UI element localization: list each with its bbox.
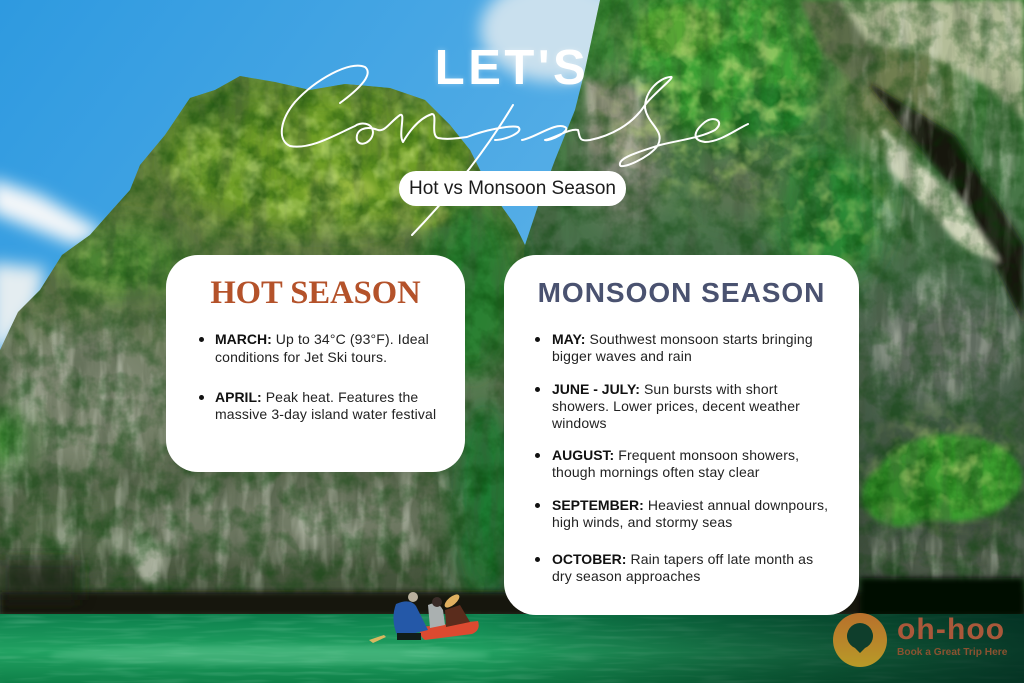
item: March: conditions for Jet Ski tours.	[215, 349, 387, 365]
panel: hot season	[166, 255, 465, 472]
item: May	[535, 331, 813, 364]
item: August	[535, 447, 799, 480]
item: September	[535, 497, 828, 530]
item: October: OCTOBER: Rain tapers off late month as	[552, 551, 813, 567]
item: June - July: JUNE - JULY: Sun bursts with short	[552, 381, 778, 397]
item: March: MARCH: Up to 34°C (93°F). Ideal	[215, 331, 429, 347]
item: May: bigger waves and rain	[552, 348, 692, 364]
item: June - July: showers. Lower prices, decent weather	[552, 398, 800, 414]
title: LET'S: LET'S	[435, 41, 589, 95]
item: June - July	[535, 381, 800, 431]
dark shoreline	[0, 592, 1024, 616]
item: September: high winds, and stormy seas	[552, 514, 732, 530]
item: May: MAY: Southwest monsoon starts bringing	[552, 331, 813, 347]
logo tagline: Book a Great Trip Here	[897, 647, 1007, 658]
heading: monsoon season: MONSOON SEASON	[538, 277, 825, 308]
logo: oh-hoo	[833, 613, 1008, 667]
item: October	[535, 551, 813, 584]
subtitle pill: Hot vs Monsoon Season	[409, 178, 616, 199]
icon: location pin ring	[833, 613, 887, 667]
item: April: APRIL: Peak heat. Features the	[215, 389, 418, 405]
item: August: though mornings often stay clear	[552, 464, 760, 480]
item: June - July: windows	[552, 415, 607, 431]
logo wordmark: oh-hoo	[897, 613, 1005, 646]
title script: Compare	[280, 64, 749, 236]
panel: monsoon season	[504, 255, 859, 615]
item: April	[199, 389, 436, 422]
item: March	[199, 331, 429, 365]
subtitle pill	[399, 171, 626, 206]
item: September: SEPTEMBER: Heaviest annual downpours,	[552, 497, 828, 513]
kayak with paddlers	[369, 592, 479, 643]
item: April: massive 3-day island water festival	[215, 406, 436, 422]
item: August: AUGUST: Frequent monsoon showers,	[552, 447, 799, 463]
item: October: dry season approaches	[552, 568, 700, 584]
heading: hot season: HOT SEASON	[210, 275, 421, 311]
lagoon water	[0, 614, 1024, 683]
clouds	[0, 0, 630, 350]
